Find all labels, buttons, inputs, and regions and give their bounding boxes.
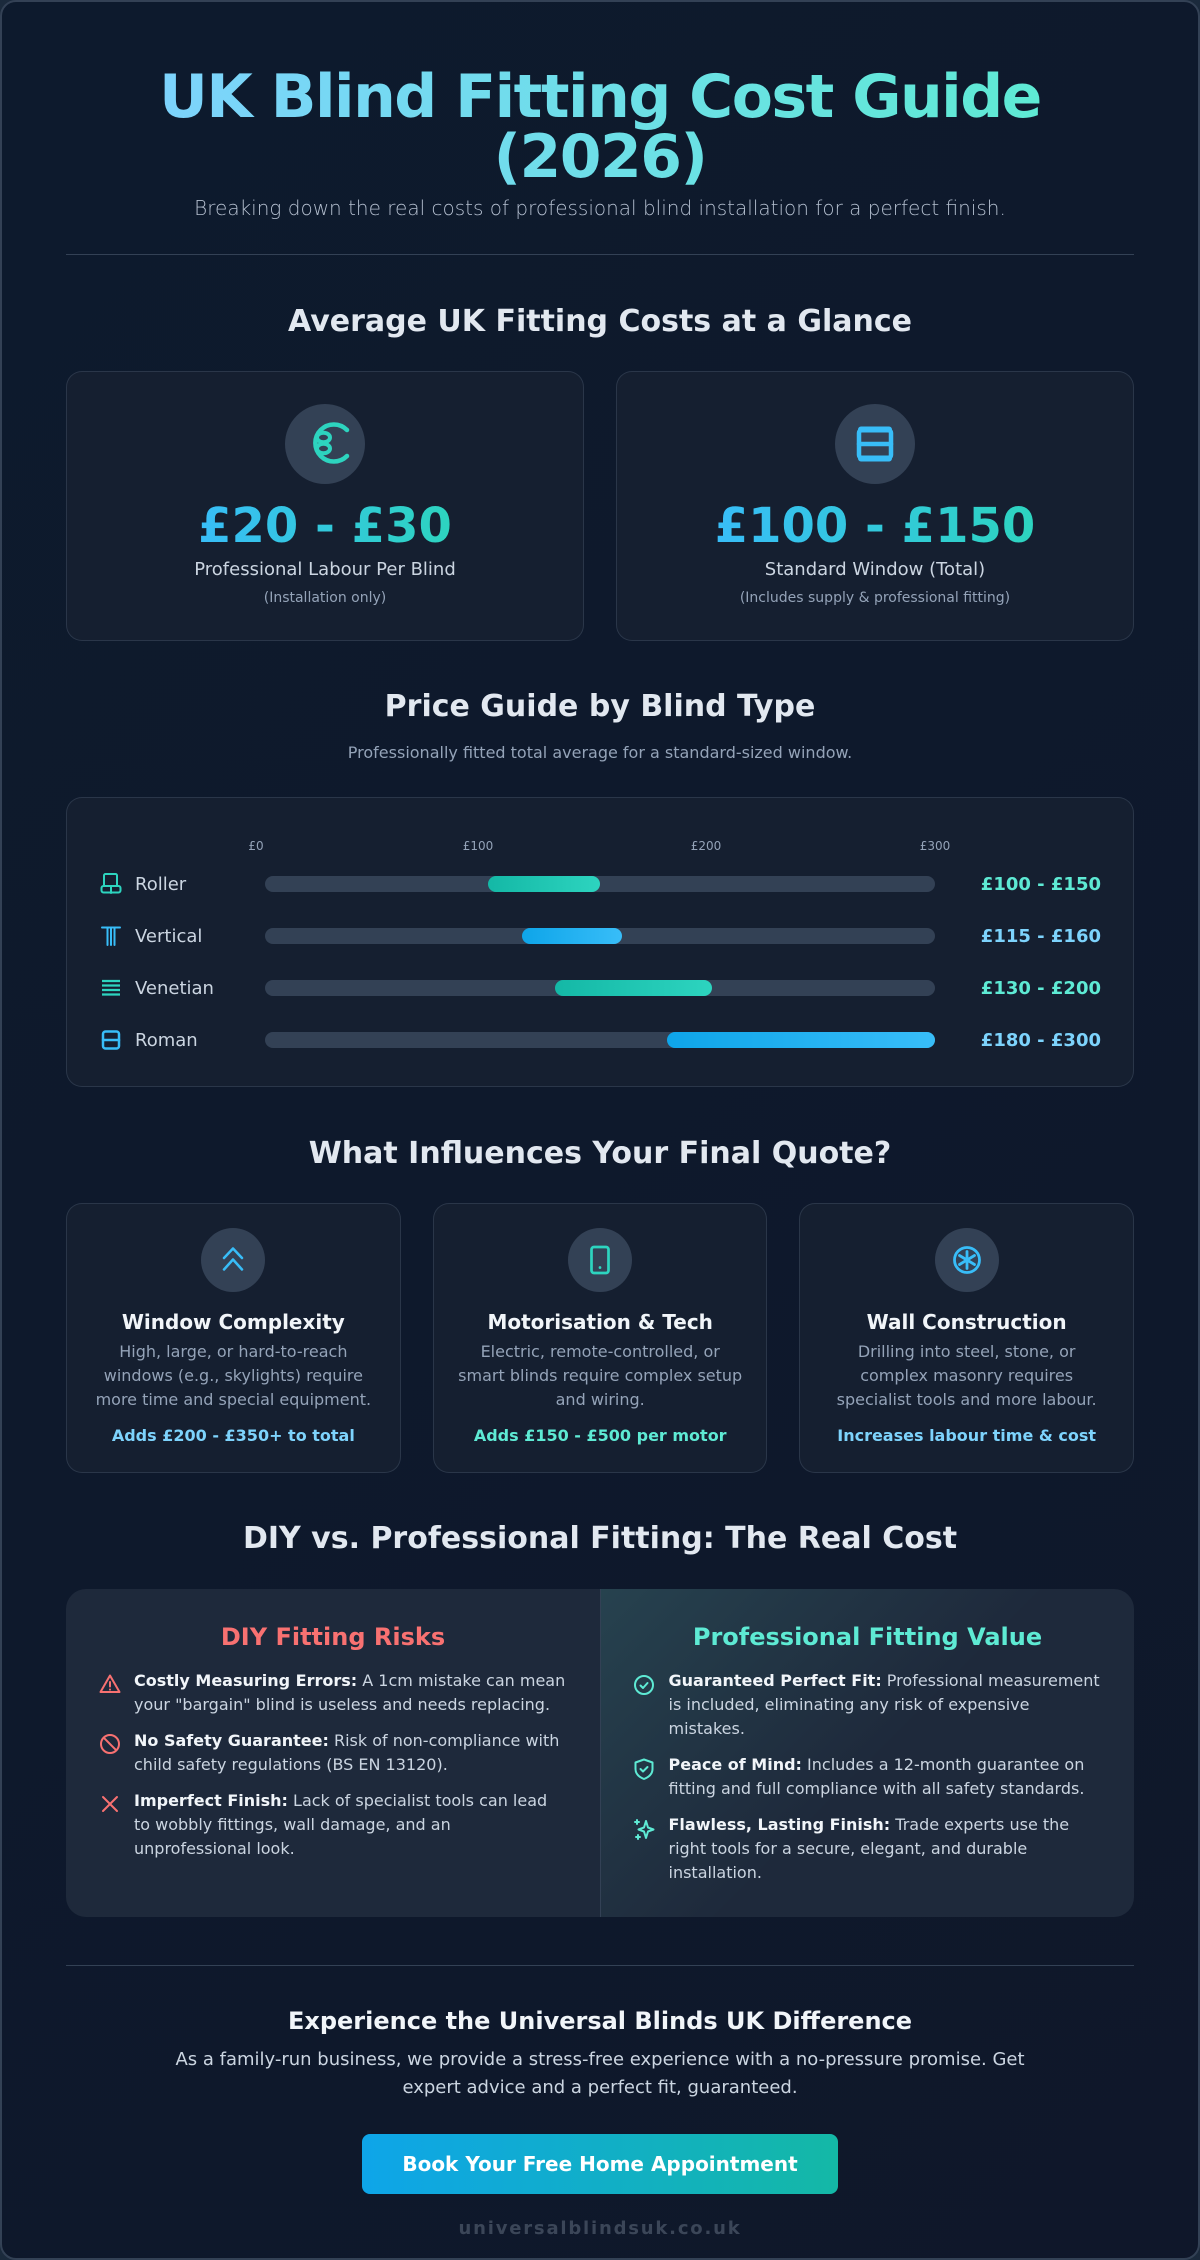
price: £100 - £150 [715,498,1035,554]
description: windows (e.g., skylights) require [104,1366,363,1385]
icon: roman blind [102,1030,120,1050]
button: book appointment: Book Your Free Home Appointment [402,2152,798,2176]
description: Drilling into steel, stone, or [858,1342,1075,1361]
icon: drill asterisk [935,1228,999,1292]
risk: safety: No Safety Guarantee: Risk of non-compliance with [134,1731,559,1750]
value: finish [634,1815,1069,1882]
row: vertical: £115 - £160 [981,926,1101,947]
description [837,1342,1097,1409]
value: peace of mind: fitting and full compliance with all safety standards. [668,1779,1084,1798]
icon: coin [285,404,365,484]
description [458,1342,742,1409]
title: (2026) [494,122,706,192]
row: roller [100,873,1101,895]
axis labels: £0 [248,839,264,853]
cost impact: Adds £150 - £500 per motor [474,1426,727,1445]
value: peace of mind: Peace of Mind: Includes a 12-month guarantee on [668,1755,1084,1774]
value: finish: Flawless, Lasting Finish: Trade experts use the [668,1815,1069,1834]
description [96,1342,371,1409]
cost impact: Adds £200 - £350+ to total [112,1426,355,1445]
price: £20 - £30 [198,498,452,554]
value: fit: is included, eliminating any risk of expensive [668,1695,1029,1714]
row: roman: £180 - £300 [981,1030,1101,1051]
row: venetian [102,978,1101,999]
text block: promise [175,2049,1025,2098]
card title: Motorisation & Tech [487,1310,713,1334]
row: venetian: £130 - £200 [981,978,1101,999]
row: vertical [101,926,1101,947]
label: Standard Window (Total) [765,559,985,580]
column: DIY risks [100,1623,565,1858]
heading: comparison: DIY vs. Professional Fitting: The Real Cost [243,1521,957,1556]
heading: call to action: Experience the Universal Blinds UK Difference [288,2007,912,2035]
description: specialist tools and more labour. [837,1390,1097,1409]
icon: vertical blind [101,926,121,946]
text block: promise: As a family-run business, we provide a stress-free experience with a no-pressure promise. Get [175,2049,1025,2070]
row: venetian: Venetian [135,978,214,999]
panel: motorisation [433,1203,767,1473]
axis labels: £100 [463,839,493,853]
row: roman: Roman [135,1030,198,1051]
axis labels [248,839,950,853]
axis labels: £300 [920,839,950,853]
subtitle: Breaking down the real costs of professional blind installation for a perfect finish. [194,196,1006,220]
column heading: Professional Fitting Value [693,1623,1042,1651]
risk: safety: child safety regulations (BS EN 13120). [134,1755,448,1774]
card title: Wall Construction [867,1310,1067,1334]
bar chart: price by blind type [66,797,1134,1087]
value: fit: Guaranteed Perfect Fit: Professional measurement [668,1671,1100,1690]
title [158,67,1042,187]
description: Electric, remote-controlled, or [481,1342,720,1361]
card title: Window Complexity [122,1310,345,1334]
subheading: Professionally fitted total average for a standard-sized window. [348,743,852,762]
note: (Includes supply & professional fitting) [740,590,1010,606]
risk: finish: to wobbly fittings, wall damage, and an [134,1815,451,1834]
axis labels: £200 [691,839,721,853]
icon: smartphone [568,1228,632,1292]
value: finish: installation. [668,1863,762,1882]
value: fit: mistakes. [668,1719,745,1738]
column: professional value [600,1589,1134,1917]
heading: average costs: Average UK Fitting Costs at a Glance [288,304,912,339]
icon: roller blind [100,873,122,894]
value: finish: right tools for a secure, elegant, and durable [668,1839,1027,1858]
label: Professional Labour Per Blind [194,559,456,580]
note: (Installation only) [264,590,386,606]
description: complex masonry requires [860,1366,1073,1385]
risk: finish: unprofessional look. [134,1839,295,1858]
risk: measuring: your "bargain" blind is useless and needs replacing. [134,1695,550,1714]
column heading: DIY Fitting Risks [221,1623,445,1651]
heading: influences: What Influences Your Final Quote? [309,1136,891,1171]
heading: price guide: Price Guide by Blind Type [385,689,815,724]
risk: measuring: Costly Measuring Errors: A 1cm mistake can mean [134,1671,565,1690]
button: book appointment [362,2134,838,2194]
panel: labour cost [66,371,584,641]
risk: safety [100,1731,559,1774]
value: peace of mind [634,1755,1084,1798]
icon: window [835,404,915,484]
risk: measuring [100,1671,565,1714]
row: vertical: Vertical [135,926,202,947]
row: roman [102,1030,1101,1051]
title: UK Blind Fitting Cost Guide [159,62,1041,132]
description: High, large, or hard-to-reach [119,1342,347,1361]
icon: venetian blind [102,980,120,996]
panel: window total cost [616,371,1134,641]
description: smart blinds require complex setup [458,1366,742,1385]
cost impact: Increases labour time & cost [837,1426,1096,1445]
panel: window complexity [66,1203,401,1473]
panel: wall construction [799,1203,1134,1473]
row: roller: Roller [135,874,186,895]
description: and wiring. [556,1390,645,1409]
icon: chevrons up [201,1228,265,1292]
risk: finish: Imperfect Finish: Lack of specialist tools can lead [134,1791,547,1810]
footer url: universalblindsuk.co.uk [459,2218,741,2239]
value: fit [634,1671,1100,1738]
risk: finish [102,1791,547,1858]
text block: promise: expert advice and a perfect fit, guaranteed. [402,2077,798,2098]
panel: comparison [66,1589,1134,1917]
row: roller: £100 - £150 [981,874,1101,895]
description: more time and special equipment. [96,1390,371,1409]
